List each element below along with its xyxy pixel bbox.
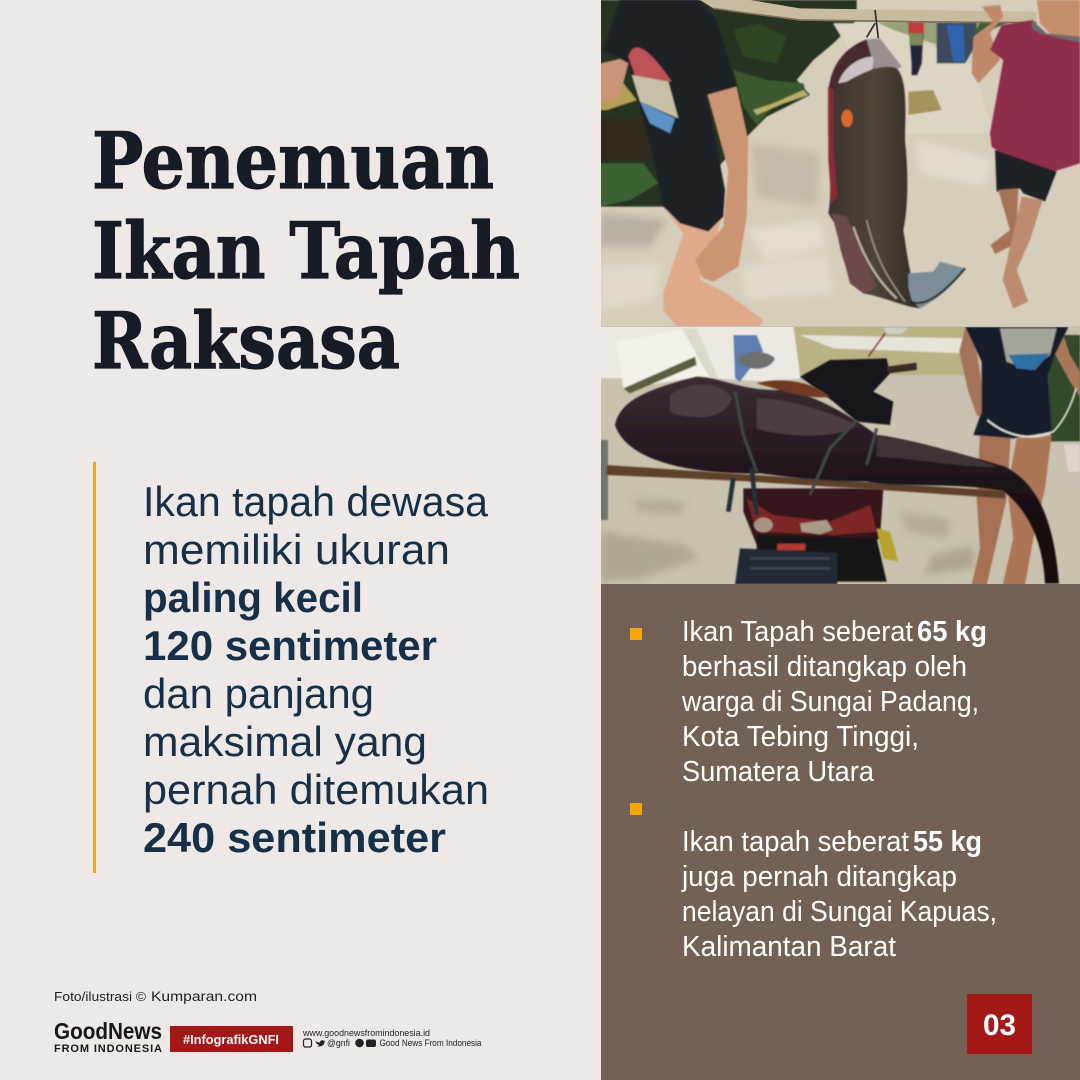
logo: GoodNews From Indonesia <box>54 1018 162 1055</box>
text block: fish size: memiliki ukuran <box>143 526 450 573</box>
icon: facebook <box>355 1039 364 1047</box>
list item 2: Kalimantan Barat <box>682 931 896 963</box>
icon: youtube <box>366 1040 376 1047</box>
title: Penemuan <box>92 116 494 207</box>
text block: fish size: dan panjang <box>143 670 374 717</box>
list item 2: Ikan tapah seberat <box>682 826 909 858</box>
website and social handles: www.goodnewsfromindonesia.id <box>302 1028 430 1038</box>
list item 2: 55 kg <box>913 826 982 858</box>
brown info panel <box>601 584 1080 1080</box>
bullet marker 1 <box>630 628 642 640</box>
list item 1: berhasil ditangkap oleh <box>682 651 967 683</box>
bullet marker 2 <box>630 803 642 815</box>
title: Ikan Tapah <box>92 206 520 297</box>
text block: fish size: Ikan tapah dewasa <box>143 478 489 525</box>
photo credit: Foto/ilustrasi © <box>54 989 146 1004</box>
logo: GoodNews From Indonesia: FROM INDONESIA <box>54 1043 162 1055</box>
divider between photos <box>601 326 1080 328</box>
title: Raksasa <box>92 296 400 387</box>
bullet list <box>630 616 997 963</box>
wooden plank <box>607 465 1005 498</box>
page number badge <box>967 994 1032 1054</box>
puddle <box>908 90 942 115</box>
text block: fish size <box>143 478 489 861</box>
photo: fish carried on a pole <box>600 0 1080 326</box>
person with rope <box>959 325 1080 585</box>
text block: fish size: 240 sentimeter <box>143 814 446 861</box>
man in maroon shirt <box>972 0 1080 308</box>
background <box>600 325 800 382</box>
hashtag badge <box>170 1026 293 1052</box>
text block: fish size: paling kecil <box>143 574 363 621</box>
logo: GoodNews From Indonesia: GoodNews <box>54 1018 162 1044</box>
list item 1: 65 kg <box>917 616 987 648</box>
icon: twitter <box>315 1040 326 1046</box>
website and social handles: Good News From Indonesia <box>380 1038 482 1048</box>
website and social handles <box>302 1028 482 1048</box>
page number badge: 03 <box>983 1009 1016 1042</box>
catfish hanging <box>828 38 965 308</box>
man in black shirt <box>600 0 763 326</box>
distant road and people <box>833 23 993 133</box>
ground stains <box>600 498 973 582</box>
left panel background <box>0 0 601 1080</box>
website and social handles: @gnfi <box>327 1038 350 1048</box>
list item 2 <box>681 826 997 963</box>
photo: fish on motorbike <box>600 325 1080 585</box>
list item 2: nelayan di Sungai Kapuas, <box>682 896 997 928</box>
carrying pole <box>700 0 1037 23</box>
accent rule <box>93 462 96 873</box>
text block: fish size: maksimal yang <box>143 718 427 765</box>
list item 1: warga di Sungai Padang, <box>681 686 979 718</box>
road dappling <box>600 140 993 310</box>
text block: fish size: 120 sentimeter <box>143 622 437 669</box>
list item 1: Ikan Tapah seberat <box>682 616 913 648</box>
list item 1 <box>681 616 987 788</box>
title <box>92 116 520 387</box>
list item 1: Kota Tebing Tinggi, <box>682 721 919 753</box>
hashtag badge: #InfografikGNFI <box>183 1032 279 1047</box>
icon: instagram <box>304 1039 312 1047</box>
list item 1: Sumatera Utara <box>682 756 875 788</box>
motorbike <box>735 328 917 584</box>
text block: fish size: pernah ditemukan <box>143 766 489 813</box>
fence and pillar <box>622 332 706 389</box>
vegetation <box>600 0 857 207</box>
photo credit: Kumparan.com <box>151 988 257 1004</box>
list item 2: juga pernah ditangkap <box>681 861 957 893</box>
photo credit <box>54 988 257 1004</box>
catfish strapped to bike <box>615 377 1059 584</box>
